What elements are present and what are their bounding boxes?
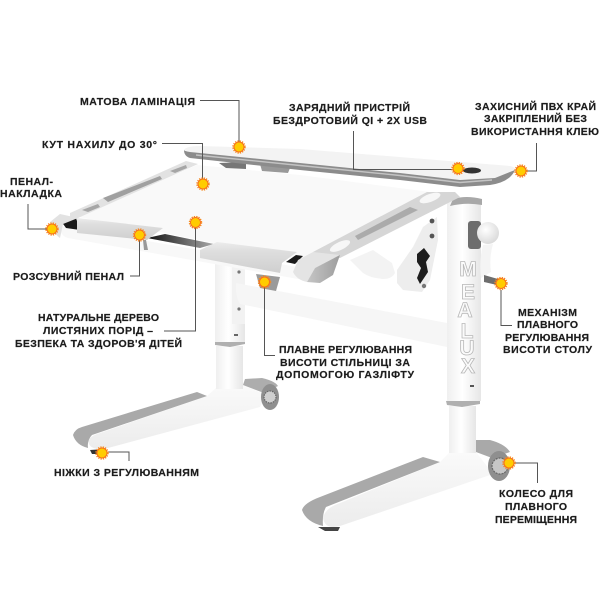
front right end cap [293, 252, 340, 283]
label: wheel: ПЛАВНОГО [505, 501, 567, 513]
label: charger: БЕЗДРОТОВИЙ QI + 2X USB [273, 114, 427, 127]
logo: MEALUX: A [457, 299, 473, 322]
logo: MEALUX: M [459, 258, 477, 281]
label: natural wood: НАТУРАЛЬНЕ ДЕРЕВО [38, 312, 159, 324]
label: gas lift height adjustment: ВИСОТИ СТІЛЬНИЦІ ЗА [280, 357, 410, 369]
logo: MEALUX: E [461, 281, 475, 304]
label: height mechanism: ПЛАВНОГО [517, 319, 578, 331]
label: overlay pencil case: НАКЛАДКА [0, 188, 62, 200]
adjustment handle [468, 221, 499, 285]
feature markers [46, 141, 527, 469]
label: height mechanism [503, 307, 592, 356]
tilt mechanism [350, 217, 438, 292]
left leg and foot [73, 262, 279, 454]
label: matte lamination: МАТОВА ЛАМІНАЦІЯ [80, 96, 195, 108]
label: overlay pencil case [0, 176, 62, 200]
right rail [313, 190, 460, 258]
label: height mechanism: ВИСОТИ СТОЛУ [503, 344, 592, 356]
label: wheel: КОЛЕСО ДЛЯ [499, 488, 573, 500]
label: charger: ЗАРЯДНИЙ ПРИСТРІЙ [289, 101, 410, 114]
label: natural wood: БЕЗПЕКА ТА ЗДОРОВ'Я ДІТЕЙ [15, 337, 182, 350]
logo: MEALUX: U [459, 337, 475, 360]
label: gas lift height adjustment [276, 344, 414, 381]
label: overlay pencil case: ПЕНАЛ- [10, 176, 54, 188]
top shelf [184, 146, 516, 187]
leader lines [28, 100, 538, 483]
logo: MEALUX [457, 258, 477, 378]
label: wheel [495, 488, 577, 526]
label: height mechanism: МЕХАНІЗМ [518, 307, 577, 319]
label: natural wood: ЛИСТЯНИХ ПОРІД – [43, 325, 153, 337]
crossbar [236, 283, 447, 347]
label: tilt angle: КУТ НАХИЛУ ДО 30° [42, 139, 157, 151]
label: sliding pencil case: РОЗСУВНИЙ ПЕНАЛ [13, 270, 124, 283]
logo: MEALUX: X [461, 355, 475, 378]
right leg and foot [302, 197, 510, 531]
label: natural wood [15, 312, 182, 350]
label: charger [273, 101, 427, 127]
label: height mechanism: РЕГУЛЮВАННЯ [505, 332, 589, 344]
label: PVC edge: ЗАХИСНИЙ ПВХ КРАЙ [475, 100, 596, 113]
label: PVC edge: ВИКОРИСТАННЯ КЛЕЮ [471, 126, 599, 138]
front edge and sliding pencil case [50, 214, 315, 282]
label: adjustable feet: НІЖКИ З РЕГУЛЮВАННЯМ [54, 467, 199, 479]
logo: MEALUX: L [461, 320, 474, 343]
label: gas lift height adjustment: ДОПОМОГОЮ ГАЗЛІФТУ [276, 369, 414, 381]
tilting desktop surface [70, 161, 430, 258]
label: PVC edge [471, 100, 599, 138]
label: PVC edge: ЗАКРІПЛЕНИЙ БЕЗ [484, 112, 587, 125]
gas lift lever [256, 274, 280, 291]
label: wheel: ПЕРЕМІЩЕННЯ [495, 514, 577, 526]
label: gas lift height adjustment: ПЛАВНЕ РЕГУЛЮВАННЯ [279, 344, 412, 356]
